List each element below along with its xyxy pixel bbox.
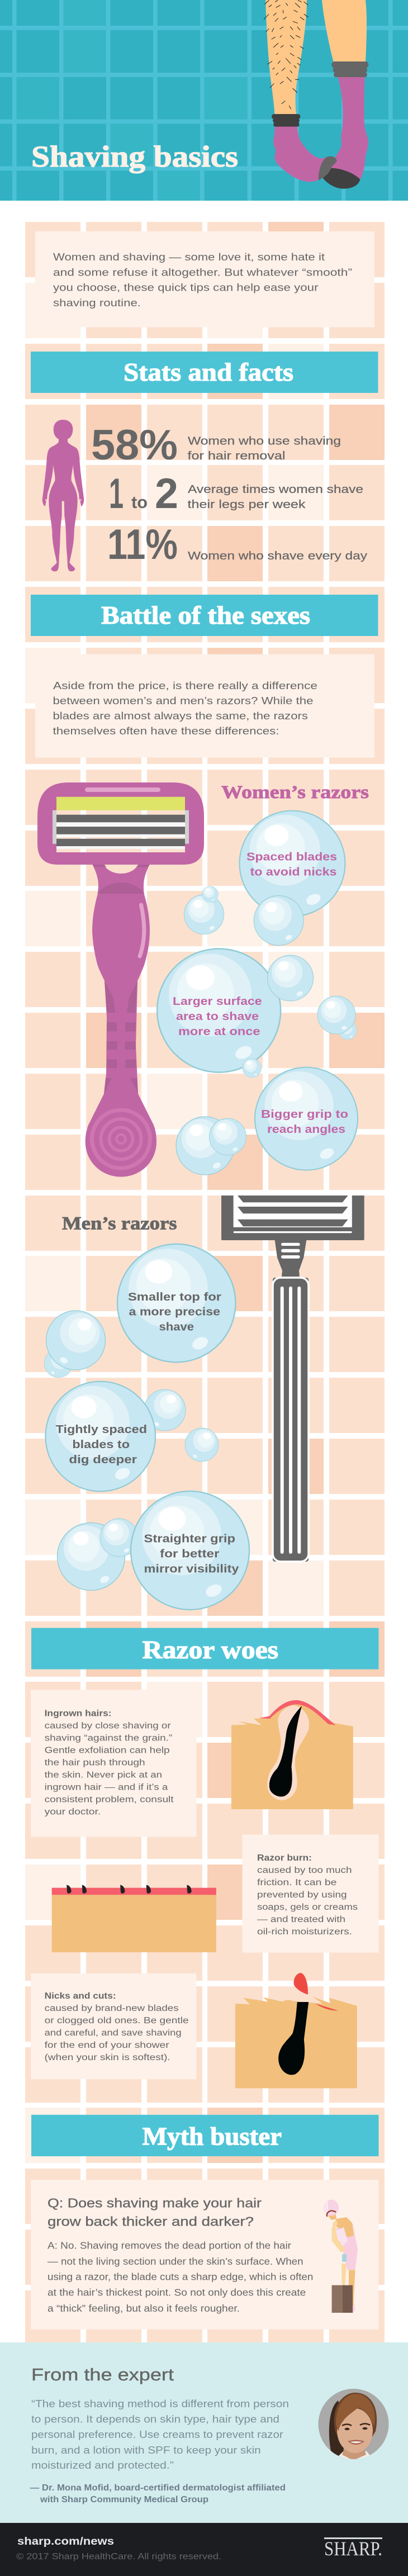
panel: razor burn: soaps, gels or creams: [257, 1903, 358, 1912]
expert quote: moisturized and protected.”: [31, 2459, 174, 2471]
panel: from the expert: [0, 2342, 408, 2523]
panel: razor burn: oil-rich moisturizers.: [257, 1927, 352, 1937]
stat: 11%: [107, 521, 367, 568]
panel: nicks and cuts: Nicks and cuts:: [45, 1991, 116, 2001]
bubble: tightly spaced: Tightly spaced: [56, 1423, 147, 1436]
icon: female silhouette: [42, 420, 84, 571]
expert quote: burn, and a lotion with SPF to keep your skin: [31, 2444, 261, 2456]
razor handle: [273, 1278, 309, 1562]
title: Shaving basics: [31, 140, 238, 173]
attribution: with Sharp Community Medical Group: [40, 2495, 208, 2504]
answer: a “thick” feeling, but also it feels rougher.: [48, 2303, 240, 2314]
heading: myth buster: Myth buster: [143, 2122, 282, 2150]
bubble: bigger grip: Bigger grip to: [261, 1108, 348, 1121]
answer: — not the living section under the skin’s surface. When: [48, 2256, 303, 2267]
stat: 1 to 2: 2: [155, 470, 178, 518]
answer: at the hair’s thickest point. So not only does this create: [48, 2287, 306, 2298]
small bubbles cluster 1: [184, 886, 303, 946]
razors intro text: Aside from the price, is there really a difference: [53, 680, 317, 691]
illustration: men's razor: [221, 1196, 364, 1562]
bubble: larger surface area: Larger surface: [173, 995, 262, 1008]
small bubbles cluster 2: [57, 1519, 138, 1591]
panel: razor burn: caused by too much: [257, 1866, 352, 1875]
bubble: bigger grip: reach angles: [267, 1123, 345, 1136]
heading: battle of the sexes: [31, 595, 378, 636]
Sharp logo: SHARP.: [324, 2537, 382, 2560]
stat: 1 to 2: Average times women shave: [188, 483, 363, 496]
stat: 1 to 2: 1: [109, 470, 124, 518]
panel: nicks and cuts: caused by brand-new blades: [45, 2004, 179, 2013]
answer: A: No. Shaving removes the dead portion of the hair: [48, 2240, 291, 2251]
panel: stats: [42, 420, 367, 571]
tiled bathroom wall background: [25, 222, 385, 2346]
answer: using a razor, the blade cuts a sharp edge, which is often: [48, 2271, 313, 2283]
razor neck: [275, 1240, 306, 1277]
stat: 11%: 11%: [107, 521, 178, 568]
stat: 58%: 58%: [91, 421, 178, 469]
panel: razor burn: friction. It can be: [257, 1878, 336, 1887]
footer url: sharp.com/news: [17, 2536, 114, 2547]
intro text: Women and shaving — some love it, some hate it: [53, 251, 325, 263]
handle shading: [92, 864, 150, 1094]
footer: [0, 2523, 408, 2576]
stat: 1 to 2: their legs per week: [188, 499, 306, 511]
panel: ingrown hairs: consistent problem, consult: [45, 1795, 174, 1805]
razor handle: [86, 864, 156, 1177]
bubble: straighter grip: [131, 1491, 249, 1610]
heading: razor woes: [31, 1628, 379, 1669]
intro text: and some refuse it altogether. But whatever “smooth”: [53, 266, 352, 278]
razors intro text: between women’s and men’s razors? While the: [53, 695, 313, 706]
panel: razor burn: [243, 1834, 379, 1953]
heading: stats and facts: Stats and facts: [124, 358, 293, 386]
heading: myth buster: [31, 2115, 379, 2156]
bubbles: men's razor features: [44, 1244, 249, 1610]
heading: stats and facts: [31, 352, 378, 393]
illustration: women's razor: [37, 782, 204, 1177]
expert quote: “The best shaving method is different from person: [31, 2398, 289, 2409]
bubble: larger surface area: more at once: [178, 1025, 260, 1038]
bubble: larger surface area: area to shave: [176, 1010, 259, 1023]
panel: ingrown hairs: your doctor.: [45, 1808, 101, 1817]
illustration: woman shaving leg: [324, 2200, 358, 2313]
attribution: — Dr. Mona Mofid, board-certified dermatologist affiliated: [30, 2483, 286, 2493]
grip rings: [92, 1110, 150, 1168]
razors intro text: blades are almost always the same, the razors: [53, 710, 308, 722]
stat: 58%: [91, 421, 341, 469]
stat: 1 to 2: to: [131, 492, 148, 512]
panel: nicks and cuts: [31, 1973, 197, 2079]
bubble: straighter grip: for better: [160, 1547, 220, 1560]
bubble: straighter grip: mirror visibility: [144, 1563, 239, 1575]
panel: nicks and cuts: for the end of your shower: [45, 2041, 169, 2050]
panel: ingrown hairs: ingrown hair — and if it’s a: [45, 1783, 168, 1792]
bubble: spaced blades: [239, 810, 345, 917]
small bubbles cluster 1: [44, 1311, 219, 1462]
razors intro text: themselves often have these differences:: [53, 725, 279, 737]
panel: razors intro: [35, 654, 374, 758]
panel: razor burn: — and treated with: [257, 1915, 345, 1924]
heading: razor woes: Razor woes: [143, 1636, 278, 1664]
bubble: smaller top: [117, 1244, 235, 1362]
panel: nicks and cuts: and careful, and save shaving: [45, 2028, 182, 2038]
illustration: ingrown hair: [231, 1700, 353, 1809]
bubble: bigger grip: [255, 1068, 358, 1170]
bubble: smaller top: a more precise: [129, 1306, 220, 1318]
small bubbles cluster 3: [176, 1117, 246, 1175]
bubble: spaced blades: to avoid nicks: [250, 866, 336, 879]
heading: women's razors: Women’s razors: [221, 782, 369, 803]
bubble: smaller top: shave: [159, 1320, 194, 1334]
handle highlight: [140, 905, 144, 956]
panel: introduction: [35, 231, 374, 328]
question: Q: Does shaving make your hair: [48, 2195, 262, 2210]
illustration: nicked skin: [235, 1973, 357, 2088]
bubble: tightly spaced: dig deeper: [69, 1453, 137, 1466]
bubble: tightly spaced: [45, 1382, 155, 1491]
expert quote: to person. It depends on skin type, hair type and: [31, 2413, 279, 2425]
panel: ingrown hairs: the skin. Never pick at an: [45, 1771, 162, 1780]
bubble: spaced blades: Spaced blades: [246, 851, 337, 863]
panel: razor burn: Razor burn:: [257, 1853, 312, 1863]
intro text: shaving routine.: [53, 297, 141, 309]
hero tile wall: [0, 0, 408, 201]
bubble: straighter grip: Straighter grip: [144, 1532, 235, 1545]
panel: razor burn: prevented by using: [257, 1890, 347, 1900]
panel: ingrown hairs: caused by close shaving or: [45, 1721, 171, 1731]
panel: ingrown hairs: Ingrown hairs:: [45, 1709, 112, 1719]
panel: nicks and cuts: (when your skin is softest).: [45, 2053, 170, 2062]
expert heading: From the expert: [31, 2365, 174, 2384]
panel: ingrown hairs: Gentle exfoliation can help: [45, 1746, 170, 1756]
illustration: razor burn skin: [52, 1885, 216, 1952]
question: grow back thicker and darker?: [48, 2214, 254, 2229]
hero banner: [0, 0, 408, 201]
stat: 58%: for hair removal: [188, 450, 285, 462]
panel: nicks and cuts: or clogged old ones. Be gentle: [45, 2016, 189, 2025]
copyright: © 2017 Sharp HealthCare. All rights reserved.: [16, 2552, 221, 2561]
heading: men's razors: Men’s razors: [62, 1214, 177, 1234]
small bubbles cluster 2: [243, 955, 357, 1078]
intro text: you choose, these quick tips can help ease your: [53, 282, 319, 293]
stat: 11%: Women who shave every day: [188, 550, 367, 562]
bubble: smaller top: Smaller top for: [128, 1291, 221, 1303]
bubble: larger surface area: [157, 949, 281, 1072]
razor head: [37, 782, 204, 865]
bubbles: women's razor features: [157, 810, 358, 1175]
panel: ingrown hairs: the hair push through: [45, 1758, 145, 1768]
panel: ingrown hairs: shaving “against the grain.”: [45, 1734, 172, 1743]
panel: myth question and answer: [31, 2180, 379, 2330]
stat: 58%: Women who use shaving: [188, 435, 341, 447]
razor head: [221, 1196, 364, 1240]
heading: battle of the sexes: Battle of the sexes: [101, 601, 310, 629]
stat: 1 to 2: [109, 470, 363, 518]
portrait of Dr. Mofid: [318, 2389, 389, 2462]
illustration: legs with socks: [264, 0, 368, 189]
bubble: tightly spaced: blades to: [72, 1438, 130, 1451]
expert quote: personal preference. Use creams to prevent razor: [31, 2428, 283, 2440]
panel: ingrown hairs: [31, 1690, 197, 1837]
